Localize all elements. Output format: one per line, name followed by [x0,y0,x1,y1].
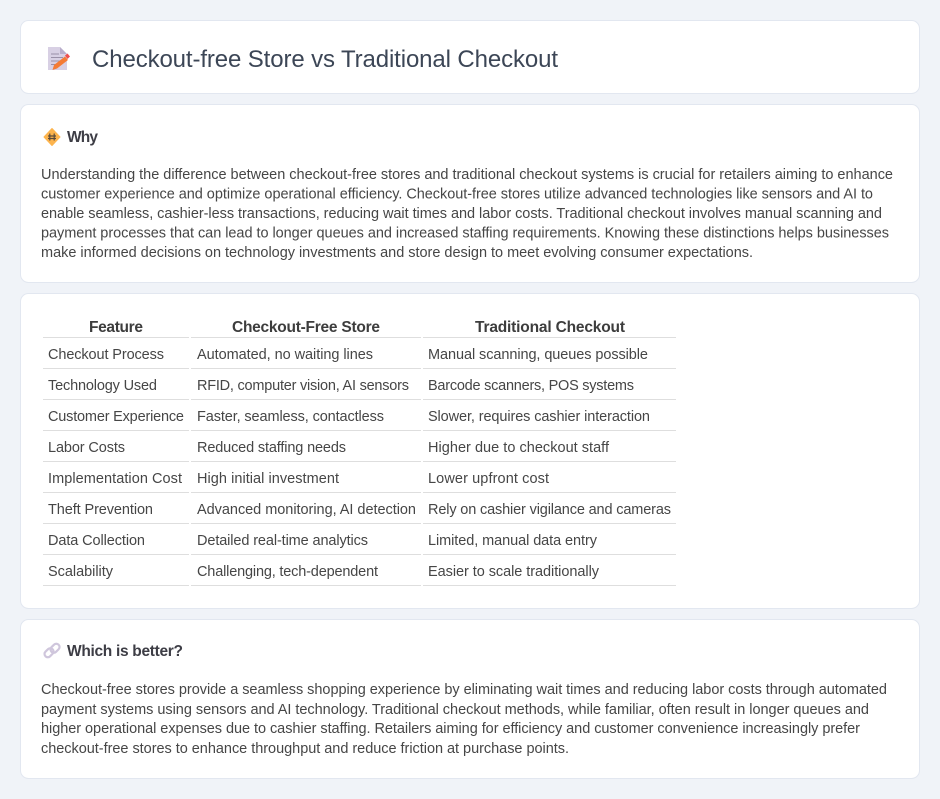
row: implementation cost [43,471,676,492]
row: theft prevention: Advanced monitoring, AI detection [197,502,416,518]
heading: which is better: Which is better? [67,643,183,660]
panel: which is better [20,620,920,778]
row: checkout process: Automated, no waiting lines [197,347,373,363]
row: labor costs [43,440,676,462]
row: theft prevention: Rely on cashier vigilance and cameras [428,502,671,518]
text block: verdict [41,682,887,757]
row: implementation cost: Lower upfront cost [428,471,549,487]
table header [43,319,676,338]
row: data collection: Detailed real-time analytics [197,533,368,549]
panel: title header [20,20,920,94]
row: labor costs: Labor Costs [48,440,125,456]
row: data collection [43,533,676,554]
icon: warning diamond [44,128,60,146]
row: implementation cost: Implementation Cost [48,471,182,487]
row: technology used: RFID, computer vision, AI sensors [197,378,409,394]
text block: why explanation [41,167,893,261]
row: customer experience: Faster, seamless, contactless [197,409,384,425]
panel: why [20,104,920,282]
row: technology used: Technology Used [48,378,157,394]
text block: why explanation: payment processes that can lead to longer queues and increased staffing requirements. Knowing these distinctions helps businesses [41,226,889,242]
row: checkout process [43,347,676,368]
row: scalability [43,564,676,586]
row: scalability: Easier to scale traditionally [428,564,600,580]
text block: verdict: payment systems using sensors and AI technology. Traditional checkout methods, while familiar, often result in longer queues and [41,702,869,718]
text block: verdict: Checkout-free stores provide a seamless shopping experience by eliminating wait times and reducing labor costs through automated [41,682,887,698]
text block: why explanation: make informed decisions on technology investments and store design to meet evolving consumer expectations. [41,245,753,261]
panel: comparison table [20,294,920,608]
text block: verdict: checkout-free stores to enhance throughput and reduce friction at purchase points. [41,741,569,757]
row: technology used: Barcode scanners, POS systems [428,378,634,394]
row: data collection: Data Collection [48,533,145,549]
heading: why: Why [67,129,98,146]
row: labor costs: Reduced staffing needs [197,440,346,456]
row: theft prevention [43,502,676,524]
row: data collection: Limited, manual data entry [428,533,598,549]
row: customer experience: Slower, requires cashier interaction [428,409,650,425]
text block: why explanation: Understanding the difference between checkout-free stores and traditional checkout systems is crucial for retailers aiming to enhance [41,167,893,183]
icon: document with pencil [48,47,70,70]
row: customer experience: Customer Experience [48,409,184,425]
row: customer experience [43,409,676,430]
row: scalability: Challenging, tech-dependent [197,564,378,580]
table header: Feature [89,319,143,336]
table header: Traditional Checkout [475,319,625,336]
text block: why explanation: customer experience and optimize operational efficiency. Checkout-free stores utilize advanced technologies like sensors and AI to [41,186,873,202]
row: scalability: Scalability [48,564,114,580]
text block: why explanation: enable seamless, cashier-less transactions, reducing wait times and labor costs. Traditional checkout involves manual scanning and [41,206,882,222]
text block: verdict: higher operational expenses due to cashier staffing. Retailers aiming for efficiency and customer convenience increasingly prefer [41,721,860,737]
row: theft prevention: Theft Prevention [48,502,153,518]
row: labor costs: Higher due to checkout staff [428,440,610,456]
table header: Checkout-Free Store [232,319,380,336]
row: checkout process: Checkout Process [48,347,164,363]
title: Checkout-free Store vs Traditional Checkout [92,46,558,73]
row: technology used [43,378,676,400]
row: implementation cost: High initial investment [197,471,339,487]
icon: chain link [43,642,61,659]
row: checkout process: Manual scanning, queues possible [428,347,648,363]
